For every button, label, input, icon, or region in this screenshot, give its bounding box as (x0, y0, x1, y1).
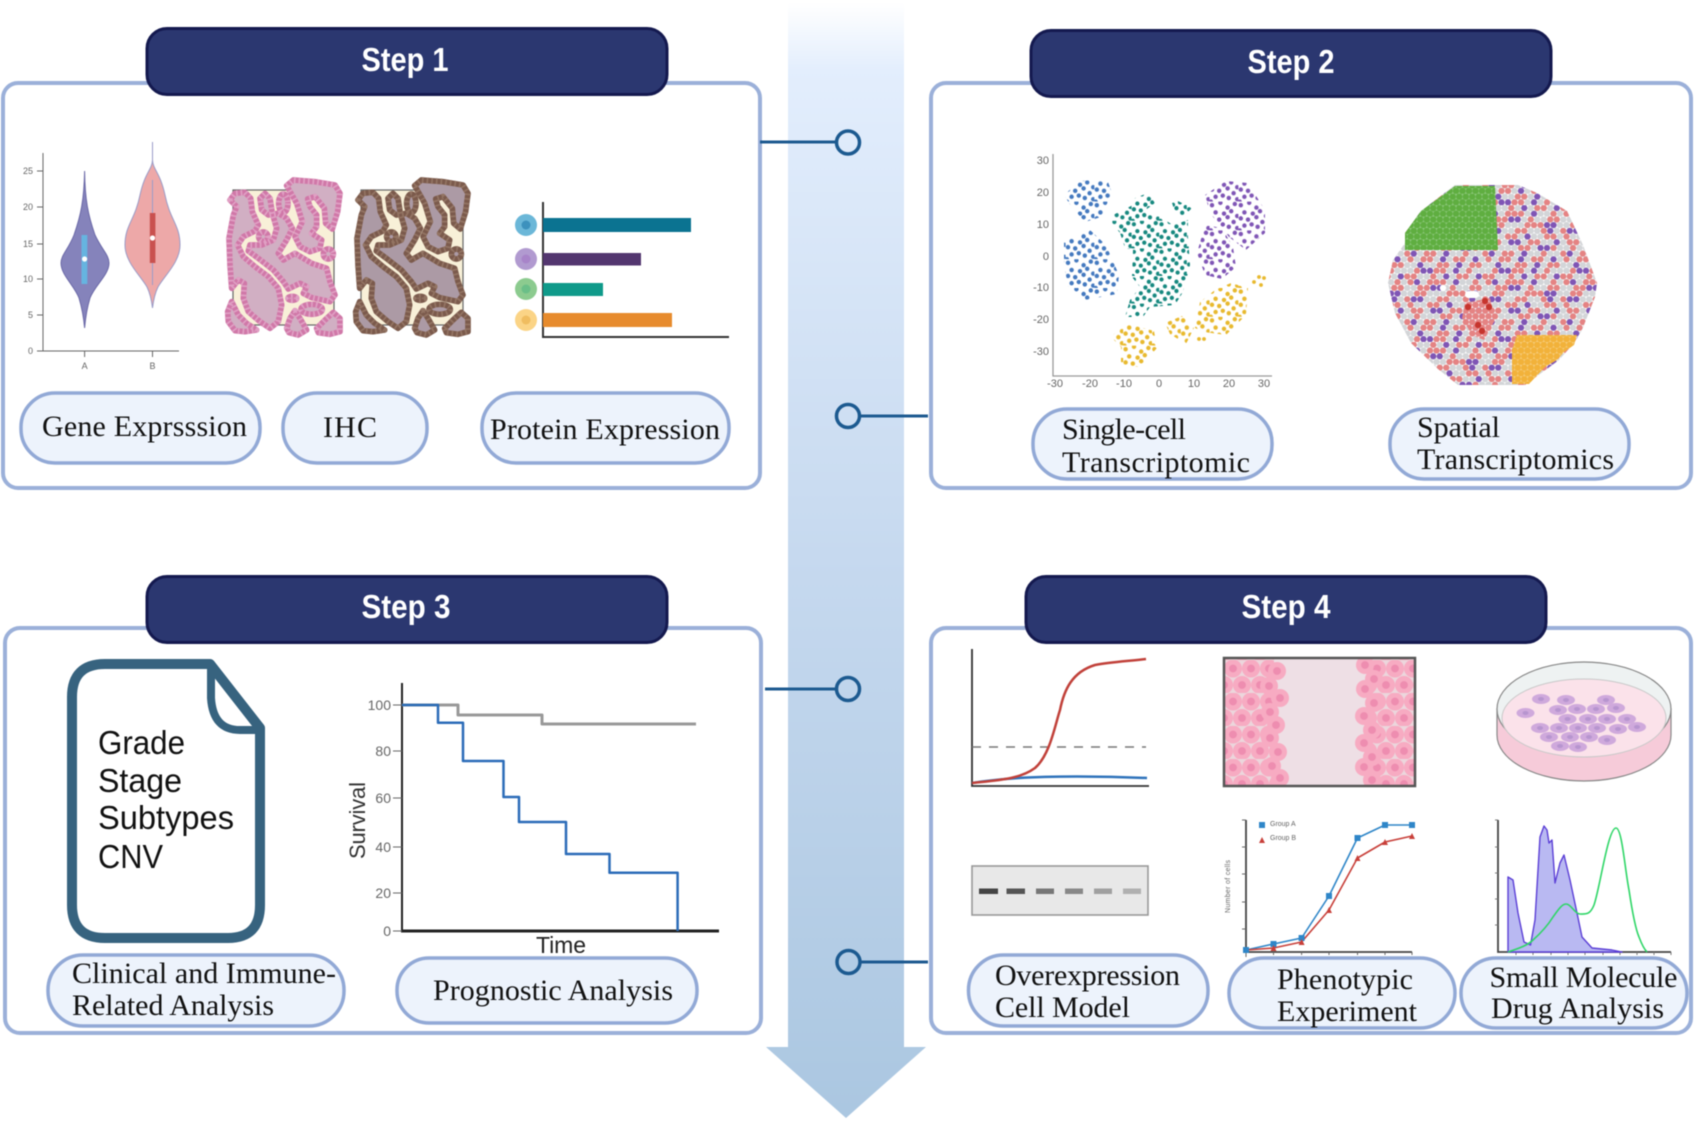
single-cell scatter plot: -30 (1033, 346, 1049, 358)
document icon with clinical variables: Grade (98, 724, 185, 761)
label: clinical and immune-related analysis (48, 955, 344, 1026)
heading: step 3 (147, 576, 667, 642)
violin plot (23, 142, 180, 371)
label: gene expression (21, 393, 260, 463)
single-cell scatter plot: 0 (1156, 378, 1162, 390)
heading: step 3: Step 3 (362, 588, 450, 625)
document icon with clinical variables (72, 664, 262, 938)
panel frame (931, 83, 1691, 488)
violin plot: 15 (23, 239, 33, 249)
label: protein expression (482, 393, 729, 463)
label: single-cell transcriptomic: Transcriptomic (1062, 446, 1250, 479)
Kaplan-Meier survival chart: 40 (375, 839, 391, 855)
single-cell scatter plot: -10 (1033, 282, 1049, 294)
central downward arrow (766, 3, 926, 1118)
label: phenotypic experiment: Phenotypic (1277, 963, 1413, 996)
Kaplan-Meier survival chart: Survival (345, 782, 370, 859)
single-cell scatter plot: 20 (1223, 378, 1235, 390)
label: overexpression cell model (968, 955, 1208, 1026)
heading: step 4: Step 4 (1242, 588, 1331, 625)
single-cell scatter plot: 30 (1258, 378, 1270, 390)
label: single-cell transcriptomic (1033, 409, 1272, 479)
violin plot: 25 (23, 166, 33, 176)
label: spatial transcriptomics: Transcriptomics (1417, 443, 1614, 476)
flow cytometry histogram (1495, 820, 1671, 955)
document icon with clinical variables: Stage (98, 762, 182, 799)
Kaplan-Meier survival chart: Time (536, 932, 586, 958)
cell growth line chart (1225, 820, 1415, 957)
label: spatial transcriptomics (1390, 409, 1629, 479)
Kaplan-Meier survival chart: 80 (375, 743, 391, 759)
single-cell scatter plot: 20 (1037, 187, 1049, 199)
Kaplan-Meier survival chart: 20 (375, 885, 391, 901)
single-cell scatter plot: -10 (1116, 378, 1132, 390)
spatial transcriptomics spot map (1388, 185, 1597, 385)
heading: step 1: Step 1 (362, 41, 448, 78)
label: gene expression: Gene Exprsssion (42, 410, 247, 443)
panel: step 4 (931, 576, 1691, 1033)
heading: step 2 (1031, 30, 1551, 96)
IHC tissue: brown stain (356, 180, 468, 335)
petri dish with cells (1497, 662, 1671, 781)
label: IHC (283, 393, 427, 463)
single-cell scatter plot: -20 (1033, 314, 1049, 326)
label: small molecule drug analysis (1461, 958, 1687, 1028)
Kaplan-Meier survival chart (345, 683, 719, 958)
violin plot: A (82, 361, 88, 371)
heading: step 2: Step 2 (1248, 43, 1334, 80)
Kaplan-Meier survival chart: 0 (383, 923, 391, 939)
protein expression bar chart (515, 202, 729, 337)
connector: step 4 to arrow (837, 950, 928, 974)
document icon with clinical variables: Subtypes (98, 799, 234, 836)
IHC tissue: H&E stain (228, 180, 340, 335)
panel frame (3, 83, 760, 488)
panel frame (931, 628, 1691, 1033)
single-cell scatter plot: 0 (1043, 251, 1049, 263)
connector: step 2 to arrow (836, 404, 928, 428)
label: single-cell transcriptomic: Single-cell (1062, 413, 1186, 446)
single-cell scatter plot: -30 (1047, 378, 1063, 390)
label: IHC: IHC (323, 411, 377, 444)
wound healing assay (1224, 656, 1415, 789)
cell growth line chart: Number of cells (1225, 860, 1232, 913)
panel frame (5, 628, 761, 1033)
cell growth line chart: Group A (1270, 821, 1296, 828)
connector: step 3 to arrow (765, 678, 860, 700)
panel: step 3 (5, 576, 761, 1033)
label: protein expression: Protein Expression (490, 413, 720, 446)
label: spatial transcriptomics: Spatial (1417, 411, 1500, 444)
panel: step 1 (3, 28, 760, 488)
connector: step 1 to arrow (760, 131, 860, 154)
violin plot: 0 (28, 346, 33, 356)
violin plot: 5 (28, 310, 33, 320)
heading: step 4 (1026, 576, 1546, 642)
label: phenotypic experiment (1229, 958, 1455, 1028)
document icon with clinical variables: CNV (98, 838, 163, 875)
cell growth line chart: Group B (1270, 835, 1296, 842)
single-cell scatter plot (1033, 154, 1272, 390)
single-cell scatter plot: 10 (1188, 378, 1200, 390)
heading: step 1 (147, 28, 667, 94)
expression curve chart (972, 649, 1149, 786)
label: prognostic analysis (397, 958, 697, 1023)
single-cell scatter plot: -20 (1082, 378, 1098, 390)
label: phenotypic experiment: Experiment (1277, 995, 1418, 1028)
label: small molecule drug analysis: Drug Analysis (1491, 992, 1664, 1025)
label: overexpression cell model: Cell Model (995, 991, 1130, 1024)
western blot gel (972, 866, 1148, 915)
label: overexpression cell model: Overexpression (995, 959, 1180, 992)
violin plot: B (149, 361, 156, 371)
violin plot: 10 (23, 274, 33, 284)
single-cell scatter plot: 10 (1037, 219, 1049, 231)
Kaplan-Meier survival chart: 60 (375, 790, 391, 806)
single-cell scatter plot: 30 (1037, 155, 1049, 167)
violin plot: 20 (23, 202, 33, 212)
label: small molecule drug analysis: Small Molecule (1490, 961, 1678, 994)
label: clinical and immune-related analysis: Clinical and Immune- (72, 957, 336, 990)
label: clinical and immune-related analysis: Related Analysis (72, 989, 274, 1022)
label: prognostic analysis: Prognostic Analysis (433, 974, 673, 1007)
panel: step 2 (931, 30, 1691, 488)
Kaplan-Meier survival chart: 100 (368, 697, 391, 713)
